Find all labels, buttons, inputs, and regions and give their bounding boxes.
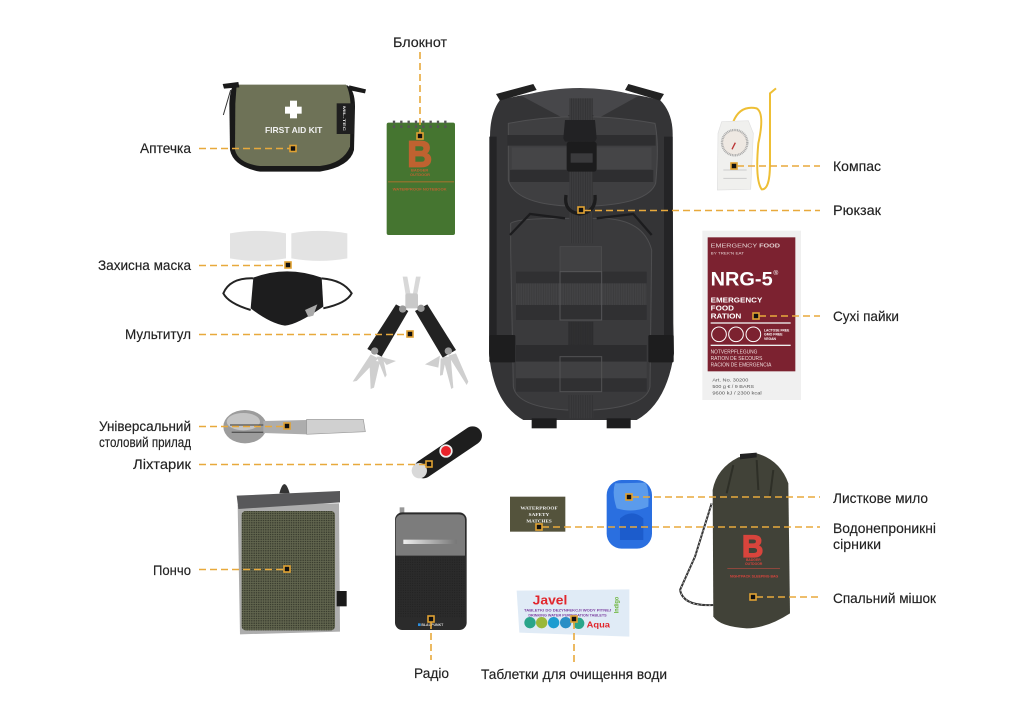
icon: emergency food ration: EMERGENCY [711,296,762,305]
callout: poncho [153,562,290,578]
callout: radio: Радіо [414,665,449,681]
icon: emergency food ration: 500 g € / 9 BARS [712,384,754,389]
icon: radio [395,507,467,630]
callout: poncho: Пончо [153,562,191,578]
callout: notebook: Блокнот [393,34,448,50]
icon: emergency food ration: ® [773,269,778,277]
icon: water purification tablets: Aqua [587,620,610,630]
icon: notebook: WATERPROOF NOTEBOOK [393,188,447,192]
icon: sleeping bag: NIGHTPACK SLEEPING BAG [730,574,779,578]
callout: waterproof matches: сірники [833,536,881,552]
icon: emergency food ration: RATION DE SECOURS [711,356,763,362]
icon: sleeping bag [680,453,790,628]
icon: emergency food ration: FOOD [711,304,734,313]
icon: emergency food ration: EMERGENCY FOOD [711,244,780,250]
icon: sheet soap [607,480,652,549]
icon: water purification tablets: Indigo [613,597,620,613]
icon: emergency food ration: BY TREK'N EAT [711,252,744,256]
callout: compass: Компас [833,158,881,174]
icon: water purification tablets: Javel [533,593,567,607]
callout: universal cutlery: Універсальний [99,418,191,434]
icon: notebook [387,121,455,235]
callout: sleeping bag: Спальний мішок [833,590,937,606]
callout: protective mask: Захисна маска [98,257,191,273]
icon: emergency food ration: RATION [711,312,742,321]
icon: sleeping bag: B [742,529,763,564]
icon: first aid kit: FIRST AID KIT [265,125,322,135]
callout: compass [731,158,881,174]
icon: emergency food ration: LACTOSE FREE [764,329,790,333]
callout: notebook [393,34,448,139]
icon: emergency food ration: RACION DE EMERGENCIA [711,362,772,368]
icon: compass [717,88,776,190]
icon: water purification tablets [517,589,629,637]
icon: emergency food ration: NOTVERPFLEGUNG [711,349,757,355]
icon: water purification tablets: DRINKING WATER PURIFICATION TABLETS [528,614,607,618]
callout: sleeping bag [750,590,937,606]
icon: flashlight [412,436,473,478]
callout: dry rations [753,308,899,324]
callout: radio [414,616,449,681]
icon: universal cutlery [223,410,365,443]
icon: waterproof matches: WATERPROOF [520,505,558,510]
icon: waterproof matches [510,497,565,532]
icon: mask filters [230,231,347,261]
callout: waterproof matches: Водонепроникні [833,520,936,536]
icon: first aid kit: MIL-TEC [342,106,346,132]
callout: flashlight [133,456,432,472]
callout: sheet soap: Листкове мило [833,490,928,506]
callout: waterproof matches [536,520,936,552]
icon: sleeping bag: OUTDOOR [745,562,763,566]
icon: emergency food ration: GMO FREE [764,333,783,337]
callout: multitool: Мультитул [125,326,191,342]
icon: emergency food ration: 9600 kJ / 2300 kcal [712,391,762,396]
icon: notebook: B [407,134,432,175]
callout: first aid kit: Аптечка [140,140,191,156]
callout: water purification tablets [481,616,667,682]
callout: protective mask [98,257,291,273]
icon: poncho in mesh bag [237,484,347,634]
icon: emergency food ration: Art. No. 30200 [712,377,749,382]
icon: notebook: OUTDOOR [410,173,430,177]
icon: multitool [353,277,468,389]
callout: flashlight: Ліхтарик [133,456,192,472]
icon: protective face mask [223,271,352,326]
icon: sleeping bag: BADGER [746,558,761,562]
callout: dry rations: Сухі пайки [833,308,899,324]
callout: water purification tablets: Таблетки для очищення води [481,666,667,682]
callout: first aid kit [140,140,296,156]
icon: waterproof matches: MATCHES [526,519,552,524]
callout: backpack [578,202,882,218]
icon: emergency food ration [702,231,801,400]
icon: backpack [489,84,674,428]
callout: backpack: Рюкзак [833,202,882,218]
icon: waterproof matches: SAFETY [529,512,550,517]
icon: notebook: BADGER [411,169,429,173]
icon: water purification tablets: TABLETKI DO DEZYNFEKCJI WODY PITNEJ [524,608,611,613]
icon: radio: BLAUPUNKT [421,623,443,627]
icon: first aid kit [223,82,366,172]
callout: sheet soap [626,490,928,506]
callout: universal cutlery: столовий прилад [99,434,191,450]
callout: multitool [125,326,413,342]
callout: universal cutlery [99,418,290,450]
icon: emergency food ration: VEGAN [764,337,777,341]
icon: emergency food ration: NRG-5 [711,270,773,291]
